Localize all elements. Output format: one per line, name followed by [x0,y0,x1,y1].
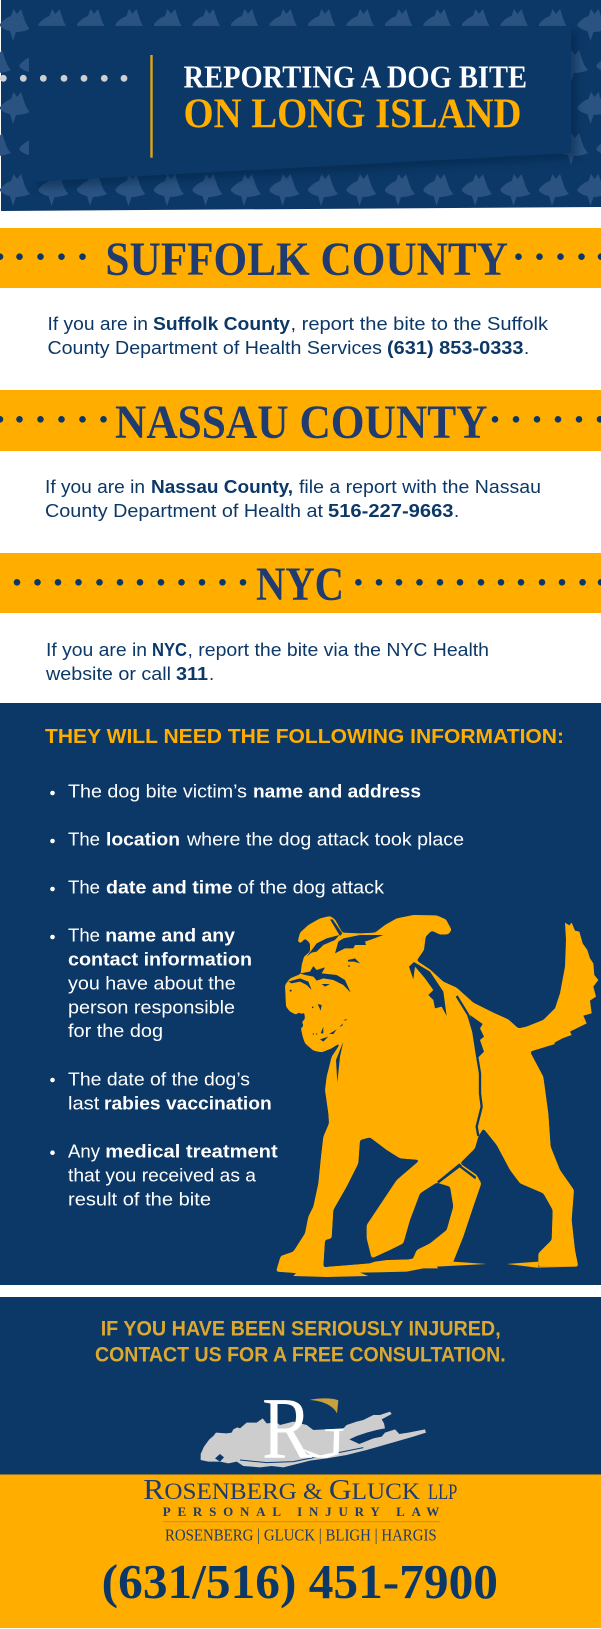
bullet list: medical treatment [105,1141,278,1162]
text: Nassau instructions: Nassau County, [151,476,293,497]
header dots [0,75,127,82]
ground shadow [293,1259,578,1277]
title: ON LONG ISLAND [184,91,522,137]
call to action text: IF YOU HAVE BEEN SERIOUSLY INJURED, [101,1317,501,1341]
bullet list: contact information [68,949,252,970]
firm partners: ROSENBERG | GLUCK | BLIGH | HARGIS [165,1526,437,1545]
text: Nassau instructions: . [454,500,459,521]
text: Nassau instructions: 516-227-9663 [328,500,454,521]
call to action text: CONTACT US FOR A FREE CONSULTATION. [95,1343,506,1367]
firm tagline: PERSONAL INJURY LAW [163,1504,439,1519]
header banner [0,0,601,211]
band: Suffolk County [0,228,601,288]
title panel [29,26,577,188]
bullet list: The dog bite victim’s [68,781,247,802]
bullet list: for the dog [68,1020,163,1041]
bullet list: you have about the [68,972,236,993]
bullet list: date and time [106,877,233,898]
logo: Long Island map and monogram [201,1381,426,1478]
bullet list: The [68,925,100,946]
text: Suffolk instructions: Suffolk County [153,313,291,334]
panel: firm contact [0,1474,601,1628]
text: NYC instructions: , report the bite via the NYC Health [188,639,489,660]
band: Nassau County [0,390,601,451]
bullet list: name and any [105,925,236,946]
dog tail [527,923,598,1052]
text: NYC instructions [45,639,489,684]
text: Suffolk instructions [48,313,549,358]
panel: call to action [0,1297,601,1478]
bullet list: of the dog attack [238,877,385,898]
logo: Long Island map and monogram: R [262,1381,312,1478]
firm name: ROSENBERG & GLUCK [143,1474,420,1506]
firm suffix: LLP [428,1479,457,1504]
call to action text [95,1317,506,1367]
bullet list: where the dog attack took place [186,829,464,850]
bullet list: last [68,1092,99,1113]
band: Suffolk County: SUFFOLK COUNTY [105,233,508,286]
band: Nassau County: NASSAU COUNTY [115,396,488,449]
text: NYC instructions: website or call [45,663,171,684]
text: NYC instructions: . [209,663,214,684]
panel heading: THEY WILL NEED THE FOLLOWING INFORMATION: [45,726,564,748]
title [184,58,527,137]
text: Suffolk instructions: , report the bite to the Suffolk [290,313,549,334]
title: REPORTING A DOG BITE [184,58,527,94]
bullet list: The [68,829,100,850]
bullet list: name and address [253,781,421,802]
text: Nassau instructions: If you are in [45,476,145,497]
icon: snarling dog [276,915,598,1277]
bullet list: result of the bite [68,1189,211,1210]
text: Suffolk instructions: If you are in [48,313,148,334]
bullet list: The date of the dog’s [68,1068,250,1089]
bullet list: person responsible [68,996,235,1017]
text: NYC instructions: If you are in [46,639,147,660]
wolf head pattern [0,9,601,206]
fur and face details [288,919,484,1183]
text: Nassau instructions: file a report with the Nassau [299,476,541,497]
text: Suffolk instructions: County Department of Health Services [48,337,382,358]
header divider [150,55,153,158]
bullet list: Any [68,1141,101,1162]
bullet list: The [68,877,100,898]
text: Nassau instructions: County Department of Health at [45,500,323,521]
text: Nassau instructions [45,476,541,521]
bullet list [50,781,464,1210]
bullet list: rabies vaccination [104,1092,272,1113]
text: Suffolk instructions: . [524,337,529,358]
bullet list: that you received as a [68,1165,257,1186]
text: NYC instructions: NYC [152,639,187,660]
panel: required information [0,703,601,1285]
text: NYC instructions: 311 [176,663,208,684]
text: Suffolk instructions: (631) 853-0333 [387,337,524,358]
band: NYC: NYC [256,558,344,611]
band: NYC [0,553,601,613]
bullet list: location [106,829,180,850]
phone number: (631/516) 451-7900 [102,1554,498,1609]
